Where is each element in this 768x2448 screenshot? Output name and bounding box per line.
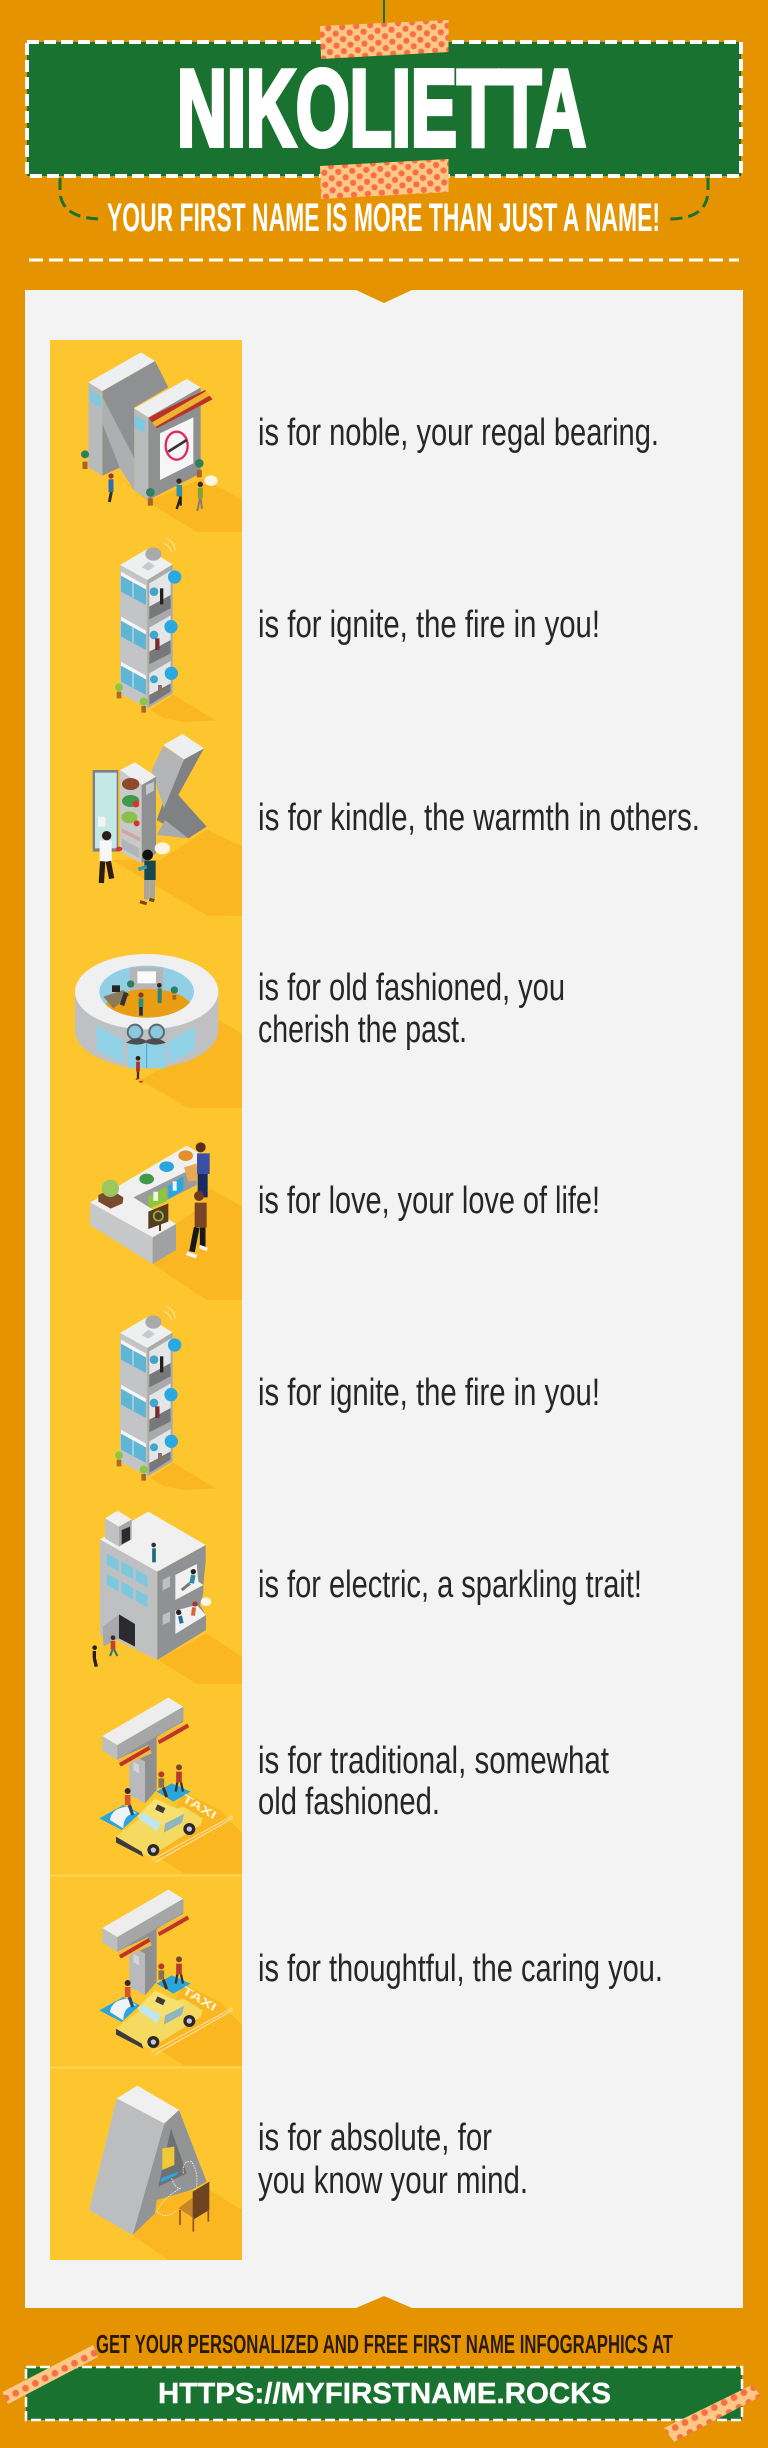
dashed connector right	[669, 178, 708, 219]
text: O: is for old fashioned, you	[258, 967, 565, 1009]
icon: letter T taxi	[99, 1698, 242, 1873]
text: I second: is for ignite, the fire in you!	[258, 1372, 600, 1414]
footer banner	[26, 2367, 742, 2420]
row: N	[81, 352, 659, 532]
dashed connector left	[60, 178, 103, 219]
tape: footer left	[2, 2345, 98, 2404]
row: E	[92, 1511, 642, 1684]
text: A: is for absolute, for	[258, 2117, 492, 2159]
text: L: is for love, your love of life!	[258, 1180, 600, 1222]
row separators	[50, 1876, 242, 2068]
tape: bottom	[320, 159, 448, 199]
text: O: cherish the past.	[258, 1009, 467, 1051]
text: A	[258, 2117, 528, 2202]
icon: letter O optician	[75, 954, 242, 1108]
icon: letter A building	[89, 2086, 242, 2260]
text: T: is for traditional, somewhat	[258, 1740, 609, 1782]
text: E: is for electric, a sparkling trait!	[258, 1564, 642, 1606]
row: O	[75, 954, 565, 1108]
text: A: you know your mind.	[258, 2160, 528, 2202]
footer url: HTTPS://MYFIRSTNAME.ROCKS	[158, 2378, 611, 2410]
text: I: is for ignite, the fire in you!	[258, 604, 600, 646]
icon: letter N building	[81, 352, 242, 532]
panel: letters	[25, 290, 743, 2308]
row: K	[93, 734, 700, 916]
row: L	[90, 1142, 600, 1300]
tape: top	[320, 20, 448, 59]
text: T	[258, 1740, 609, 1823]
text: T: old fashioned.	[258, 1781, 440, 1823]
row: I (second)	[115, 1306, 600, 1490]
row: I	[115, 538, 600, 722]
icon: letter I tower	[115, 1306, 217, 1490]
text: N: is for noble, your regal bearing.	[258, 412, 659, 454]
icon: letter T taxi	[99, 1890, 242, 2065]
title banner	[27, 42, 741, 176]
yellow letter column	[50, 340, 242, 2260]
hanging string	[383, 0, 385, 24]
dashed divider	[29, 258, 739, 262]
icon: letter L recycling	[90, 1142, 242, 1300]
row: T (second)	[99, 1890, 663, 2065]
icon: letter E building	[92, 1511, 242, 1684]
row: A	[89, 2086, 528, 2260]
tape: footer right	[664, 2385, 761, 2442]
text: O	[258, 967, 565, 1051]
icon: letter K fridge	[93, 734, 242, 916]
icon: letter I tower	[115, 538, 217, 722]
row: T	[99, 1698, 609, 1873]
